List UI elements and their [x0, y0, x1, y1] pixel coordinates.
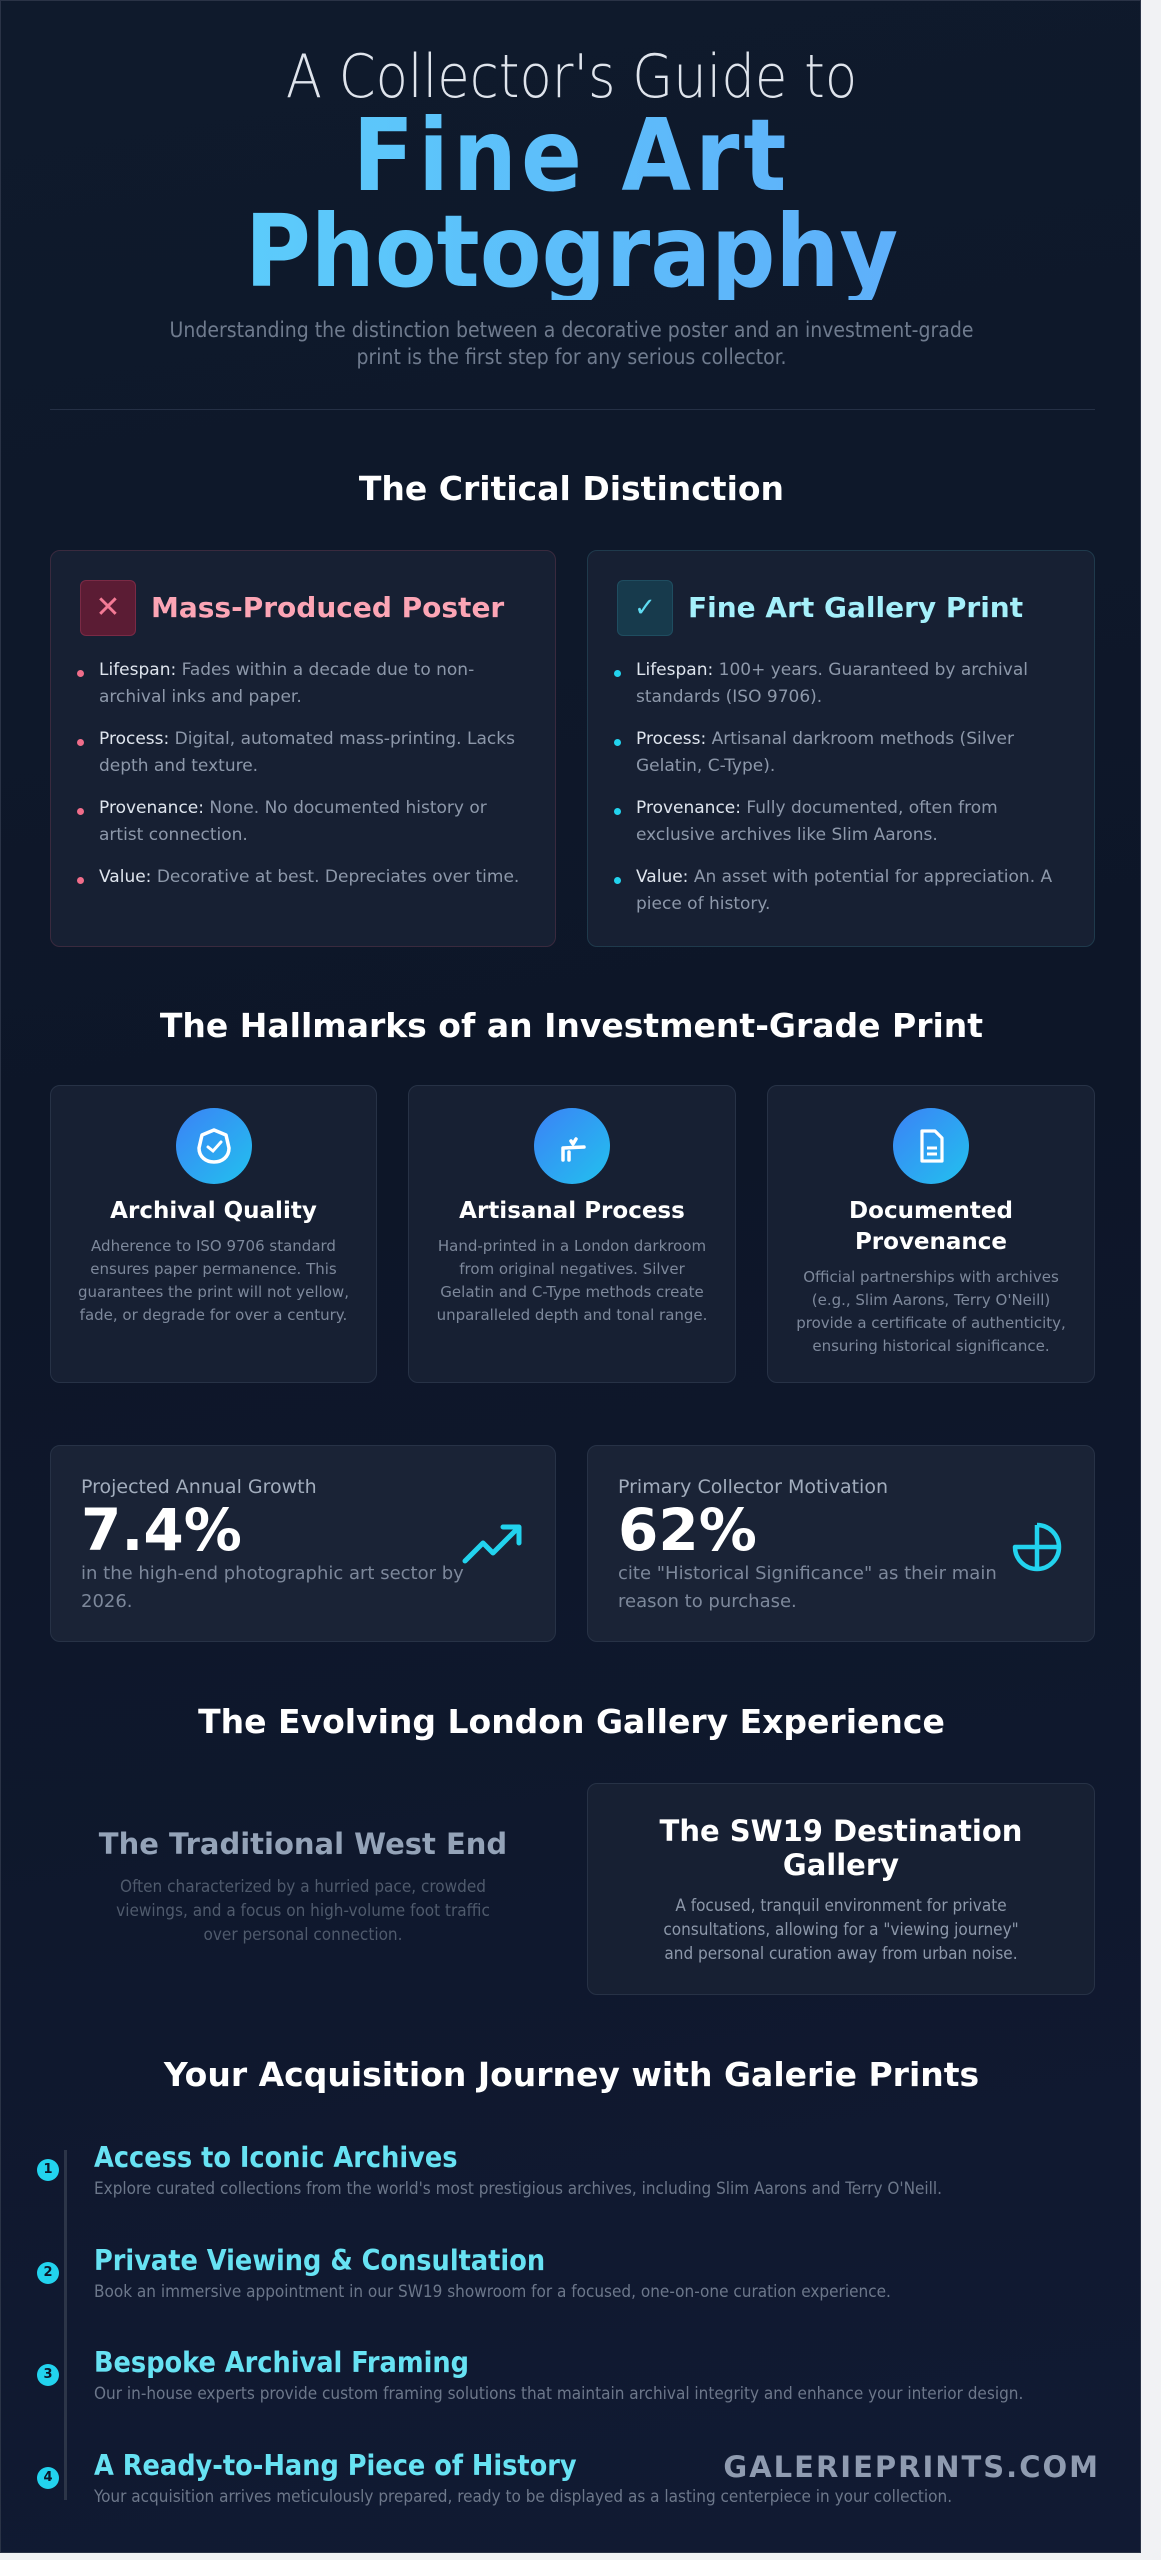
block: traditional west end — [98, 1827, 507, 1945]
card: documented provenance: Documented — [849, 1198, 1013, 1224]
card: SW19 destination: A focused, tranquil environment for private consultations, allowing for a "viewing journey" and personal curation away from urban noise. — [663, 1896, 1019, 1964]
step 1 — [37, 2141, 942, 2199]
timeline: 3 — [43, 2367, 53, 2382]
icon: x: ✕ — [95, 590, 121, 625]
bullets — [614, 660, 1052, 914]
timeline: Our in-house experts provide custom framing solutions that maintain archival integrity and enhance your interior design. — [94, 2384, 1023, 2404]
panel: fine art gallery print: Lifespan: 100+ years. Guaranteed by archival standards (ISO 9706). — [636, 660, 1028, 707]
panel: fine art gallery print: Provenance: Fully documented, often from exclusive archives like Slim Aarons. — [636, 798, 998, 845]
step 4 — [37, 2449, 952, 2507]
card: SW19 destination — [587, 1783, 1095, 1995]
icon: hand — [534, 1108, 610, 1184]
subtitle — [170, 318, 973, 369]
icon: document — [893, 1108, 969, 1184]
timeline: 2 — [43, 2265, 53, 2280]
stat: motivation: Primary Collector Motivation — [618, 1476, 888, 1498]
card: artisanal process: Hand-printed in a London darkroom from original negatives. Silver Gelatin and C-Type methods create unparalleled depth and tonal range. — [437, 1237, 707, 1324]
stat: growth: 7.4% — [81, 1496, 242, 1564]
stat: motivation — [587, 1445, 1095, 1642]
panel: fine art gallery print — [587, 550, 1095, 947]
block: traditional west end: The Traditional West End — [99, 1827, 507, 1861]
card: SW19 destination: Gallery — [783, 1848, 899, 1882]
panel: mass-produced poster: Process: Digital, automated mass-printing. Lacks depth and texture. — [99, 729, 515, 776]
panel: mass-produced poster: Lifespan: Fades within a decade due to non-archival inks and paper. — [99, 660, 474, 707]
timeline: 4 — [43, 2470, 53, 2485]
timeline — [37, 2141, 1023, 2507]
timeline: Private Viewing & Consultation — [94, 2244, 545, 2277]
icon: check — [617, 580, 673, 636]
stat: motivation: 62% — [618, 1496, 757, 1564]
title: Fine Art Photography: Photography — [245, 193, 898, 310]
card: archival quality: Adherence to ISO 9706 standard ensures paper permanence. This guarantees the print will not yellow, fade, or degrade for over a century. — [78, 1237, 349, 1324]
block: traditional west end: Often characterized by a hurried pace, crowded viewings, and a focus on high-volume foot traffic over personal connection. — [116, 1877, 490, 1945]
timeline: Explore curated collections from the world's most prestigious archives, including Slim Aarons and Terry O'Neill. — [94, 2179, 942, 2199]
heading: The Critical Distinction: The Critical Distinction — [359, 469, 784, 508]
icon: pie — [1012, 1522, 1062, 1572]
timeline: Your acquisition arrives meticulously prepared, ready to be displayed as a lasting centerpiece in your collection. — [94, 2487, 952, 2507]
card: artisanal process — [408, 1085, 736, 1383]
card: archival quality — [50, 1085, 377, 1383]
timeline: 1 — [43, 2162, 53, 2177]
bullets — [77, 660, 519, 887]
title: line 1: A Collector's Guide to — [286, 42, 857, 112]
stat: growth: in the high-end photographic art sector by 2026. — [81, 1563, 464, 1612]
timeline: Bespoke Archival Framing — [94, 2346, 469, 2379]
panel title: Fine Art Gallery Print — [688, 591, 1023, 624]
title: Fine Art Photography — [1, 108, 1142, 300]
stat: growth — [50, 1445, 556, 1642]
card: archival quality: Archival Quality — [110, 1198, 317, 1224]
timeline: A Ready-to-Hang Piece of History — [94, 2449, 577, 2482]
heading: london gallery: The Evolving London Gallery Experience — [198, 1702, 945, 1741]
panel: fine art gallery print: Value: An asset with potential for appreciation. A piece of history. — [636, 867, 1052, 914]
footer brand: GALERIEPRINTS.COM — [723, 2450, 1100, 2484]
card: documented provenance — [767, 1085, 1095, 1383]
subtitle: print is the first step for any serious collector. — [356, 345, 787, 369]
heading: hallmarks: The Hallmarks of an Investment-Grade Print — [160, 1006, 983, 1045]
stat: motivation: cite "Historical Significance" as their main reason to purchase. — [618, 1563, 997, 1612]
icon: check: ✓ — [634, 593, 656, 623]
panel: mass-produced poster: Provenance: None. No documented history or artist connection. — [99, 798, 487, 845]
subtitle: Understanding the distinction between a decorative poster and an investment-grade — [170, 318, 973, 342]
icon: shield check — [176, 1108, 252, 1184]
step 2 — [37, 2244, 891, 2302]
panel: mass-produced poster: Value: Decorative at best. Depreciates over time. — [99, 867, 519, 887]
stat: growth: Projected Annual Growth — [81, 1476, 317, 1498]
icon: trend up — [462, 1524, 522, 1564]
timeline: Access to Iconic Archives — [94, 2141, 458, 2174]
icon: x — [80, 580, 136, 636]
card: documented provenance: Provenance — [855, 1229, 1007, 1255]
panel: fine art gallery print: Process: Artisanal darkroom methods (Silver Gelatin, C-Type). — [636, 729, 1014, 776]
card: artisanal process: Artisanal Process — [459, 1198, 685, 1224]
heading: acquisition journey: Your Acquisition Journey with Galerie Prints — [164, 2055, 979, 2094]
step 3 — [37, 2346, 1023, 2404]
timeline: Book an immersive appointment in our SW19 showroom for a focused, one-on-one curation experience. — [94, 2282, 891, 2302]
panel title: Mass-Produced Poster — [151, 591, 504, 624]
card: documented provenance: Official partnerships with archives (e.g., Slim Aarons, Terry O'Neill) provide a certificate of authenticity, ensuring historical significance. — [796, 1268, 1066, 1355]
panel: mass-produced poster — [50, 550, 556, 947]
card: SW19 destination: The SW19 Destination — [660, 1814, 1022, 1848]
